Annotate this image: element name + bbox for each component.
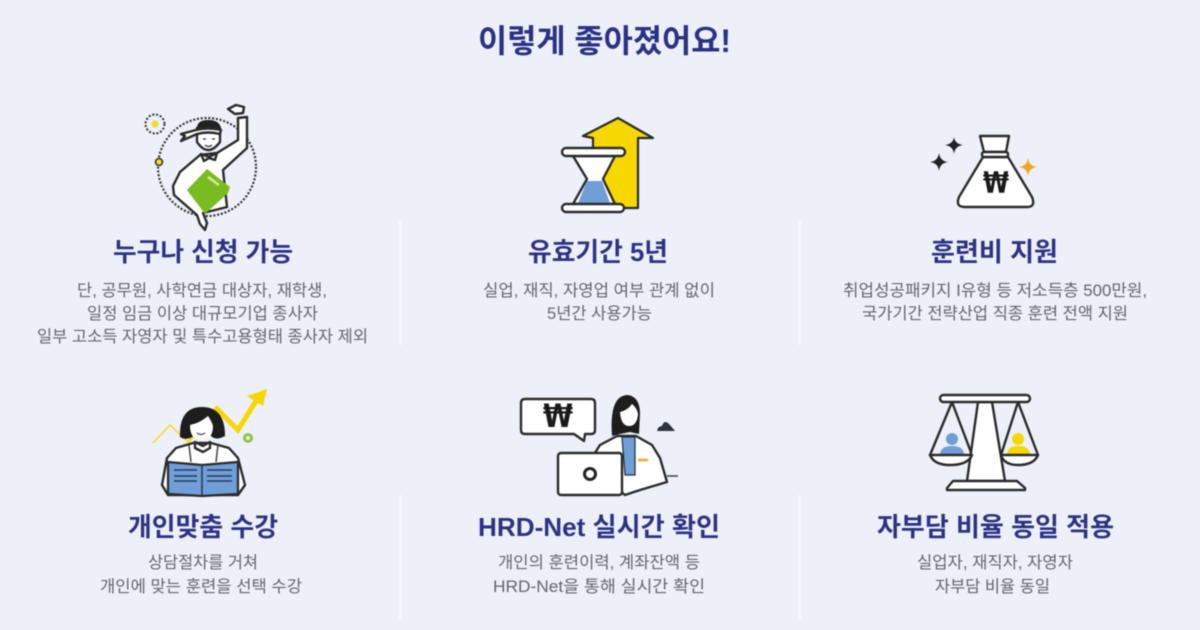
icon: money bag with sparkles: ₩ — [983, 166, 1009, 200]
icon: money bag with sparkles — [930, 136, 1037, 207]
description: 상담절차를 거쳐 — [148, 553, 258, 572]
icon: person with green folder — [146, 105, 256, 230]
description: 개인에 맞는 훈련을 선택 수강 — [100, 577, 302, 596]
title: 이렇게 좋아졌어요! — [478, 23, 731, 59]
description: 실업자, 재직자, 자영자 — [917, 553, 1073, 572]
description: 단, 공무원, 사학연금 대상자, 재학생, — [77, 281, 327, 300]
description — [493, 553, 705, 596]
panel: personalized course — [100, 389, 302, 596]
panel: training cost support — [843, 136, 1147, 323]
heading: 유효기간 5년 — [528, 237, 668, 267]
heading: 누구나 신청 가능 — [113, 237, 293, 267]
description: 자부담 비율 동일 — [935, 577, 1050, 596]
description: 실업, 재직, 자영업 여부 관계 없이 — [483, 281, 715, 300]
description: HRD-Net을 통해 실시간 확인 — [493, 577, 705, 596]
description — [917, 553, 1073, 596]
description: 취업성공패키지 I유형 등 저소득층 500만원, — [843, 281, 1147, 300]
icon: balance scale with two people — [930, 395, 1038, 490]
description: 일정 임금 이상 대규모기업 종사자 — [87, 304, 318, 323]
description: 일부 고소득 자영자 및 특수고용형태 종사자 제외 — [37, 327, 368, 346]
description: 개인의 훈련이력, 계좌잔액 등 — [498, 553, 700, 572]
description — [483, 281, 715, 323]
icon: woman with laptop and speech bubble: ₩ — [543, 397, 573, 435]
heading: HRD-Net 실시간 확인 — [478, 512, 720, 542]
description: 5년간 사용가능 — [547, 304, 652, 323]
description — [100, 553, 302, 596]
icon: woman with laptop and speech bubble — [521, 395, 678, 495]
description — [37, 281, 368, 346]
icon: woman reading with rising chart — [153, 389, 267, 496]
description — [843, 281, 1147, 323]
panel: same co-payment ratio — [877, 395, 1114, 596]
heading: 훈련비 지원 — [931, 237, 1058, 267]
description: 국가기간 전략산업 직종 훈련 전액 지원 — [862, 304, 1128, 323]
panel: valid for 5 years — [483, 118, 715, 323]
heading: 자부담 비율 동일 적용 — [877, 512, 1114, 542]
panel: real-time check on HRD-Net — [478, 395, 720, 596]
icon: hourglass and up arrow — [562, 118, 653, 212]
heading: 개인맞춤 수강 — [128, 512, 278, 542]
panel: anyone can apply — [37, 105, 368, 346]
